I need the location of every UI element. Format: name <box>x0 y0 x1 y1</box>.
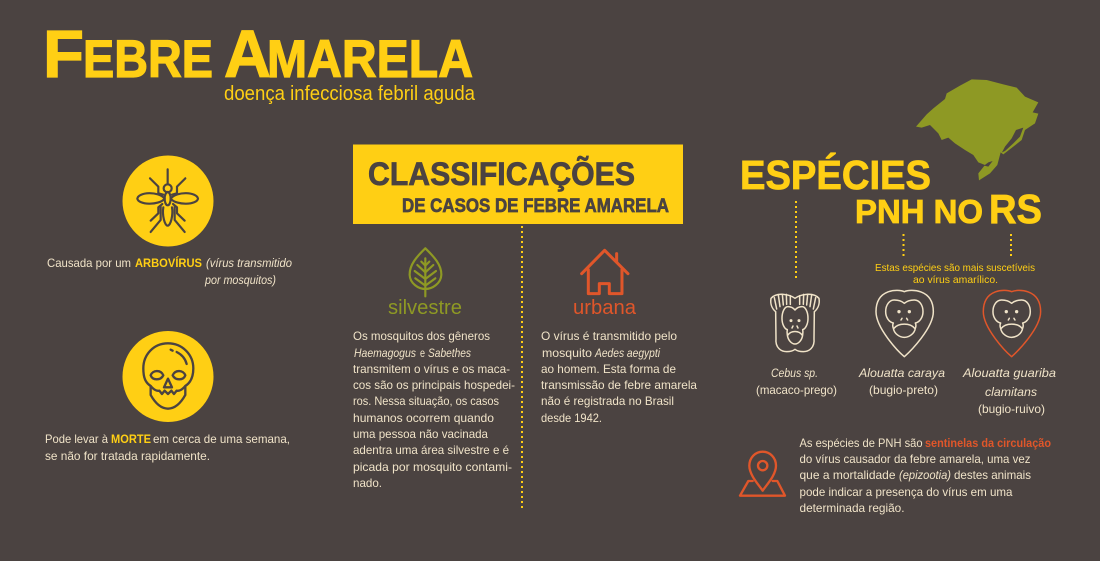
text: urbana description: desde 1942. <box>541 411 602 425</box>
text: morte: MORTE <box>111 432 151 446</box>
label: Alouatta caraya <box>858 366 945 397</box>
text: morte: em cerca de uma semana, <box>153 432 290 446</box>
subtitle: doença infecciosa febril aguda <box>224 83 476 105</box>
text: urbana description: transmissão de febre amarela <box>541 378 697 392</box>
panel: classificações heading <box>353 144 683 224</box>
note: suscetíveis: ao vírus amarílico. <box>913 274 998 286</box>
heading: espécies PNH no RS: PNH NO <box>855 193 983 230</box>
label: Alouatta guariba <box>962 366 1056 416</box>
text: silvestre description: humanos ocorrem quando <box>353 411 494 425</box>
text: silvestre description: Sabethes <box>428 346 471 360</box>
title: EBRE <box>83 30 213 89</box>
icon: mosquito <box>122 156 214 246</box>
heading: espécies PNH no RS: ESPÉCIES <box>740 152 931 198</box>
text: silvestre description: e <box>420 346 425 360</box>
note: suscetíveis <box>875 262 1035 286</box>
text: silvestre description: transmitem o vírus e os maca- <box>353 362 510 376</box>
label: Alouatta caraya: Alouatta caraya <box>858 366 945 380</box>
label: Cebus: Cebus sp. <box>771 366 818 380</box>
text: arbovirus: por mosquitos) <box>204 273 276 287</box>
panel: classificações heading: CLASSIFICAÇÕES <box>368 156 635 192</box>
icon: Alouatta guariba <box>983 290 1041 357</box>
label: Cebus <box>756 366 837 397</box>
text: sentinelas: As espécies de PNH são <box>800 436 923 450</box>
icon: skull <box>122 331 214 422</box>
text: urbana description: Aedes aegypti <box>594 346 660 360</box>
text: silvestre description: Haemagogus <box>354 346 416 360</box>
map: Rio Grande do Sul <box>916 79 1038 180</box>
icon: house <box>582 250 628 294</box>
icon: leaf <box>410 248 441 296</box>
text: arbovirus <box>47 255 292 287</box>
label: Alouatta caraya: (bugio-preto) <box>869 383 938 397</box>
text: morte: se não for tratada rapidamente. <box>45 449 210 463</box>
text: sentinelas: (epizootia) <box>899 468 951 482</box>
text: sentinelas: destes animais <box>954 468 1031 482</box>
text: urbana description: O vírus é transmitido pelo <box>541 329 677 343</box>
title: F <box>43 17 84 92</box>
text: arbovirus: ARBOVÍRUS <box>135 255 202 270</box>
text: sentinelas: do vírus causador da febre amarela, uma vez <box>800 452 1030 466</box>
icon: Cebus <box>771 294 819 352</box>
label: silvestre: silvestre <box>388 297 462 319</box>
label: Alouatta guariba: (bugio-ruivo) <box>978 402 1045 416</box>
text: silvestre description: ros. Nessa situação, os casos <box>353 394 499 408</box>
text: sentinelas: determinada região. <box>800 501 904 515</box>
text: silvestre description: Os mosquitos dos gêneros <box>353 329 490 343</box>
text: urbana description <box>541 329 697 425</box>
label: urbana: urbana <box>573 297 637 319</box>
label: Cebus: (macaco-prego) <box>756 383 837 397</box>
text: morte: Pode levar à <box>45 432 108 446</box>
text: silvestre description: uma pessoa não vacinada <box>353 427 488 441</box>
text: silvestre description: cos são os principais hospedei- <box>353 378 515 392</box>
text: silvestre description: picada por mosquito contami- <box>353 460 512 474</box>
text: arbovirus: Causada por um <box>47 256 131 270</box>
icon: Alouatta caraya <box>876 290 933 357</box>
note: suscetíveis: Estas espécies são mais suscetíveis <box>875 262 1035 274</box>
text: arbovirus: (vírus transmitido <box>206 256 292 270</box>
text: silvestre description: nado. <box>353 476 382 490</box>
text: silvestre description: adentra uma área silvestre e é <box>353 443 509 457</box>
heading: espécies PNH no RS: RS <box>989 186 1042 232</box>
text: urbana description: ao homem. Esta forma de <box>541 362 676 376</box>
text: silvestre description <box>353 329 515 490</box>
panel: classificações heading: DE CASOS DE FEBRE AMARELA <box>402 195 669 217</box>
title <box>43 17 473 92</box>
title: MARELA <box>267 30 473 89</box>
text: sentinelas: que a mortalidade <box>800 468 896 482</box>
icon: map pin <box>740 452 785 496</box>
label: Alouatta guariba: Alouatta guariba <box>962 366 1056 380</box>
text: urbana description: não é registrada no Brasil <box>541 394 674 408</box>
text: sentinelas: sentinelas da circulação <box>925 436 1051 450</box>
text: urbana description: mosquito <box>542 346 592 360</box>
text: morte <box>45 432 290 463</box>
text: sentinelas <box>800 436 1051 515</box>
heading: espécies PNH no RS <box>740 152 1042 232</box>
title: A <box>224 17 271 92</box>
text: sentinelas: pode indicar a presença do vírus em uma <box>800 485 1013 499</box>
label: Alouatta guariba: clamitans <box>985 385 1037 399</box>
